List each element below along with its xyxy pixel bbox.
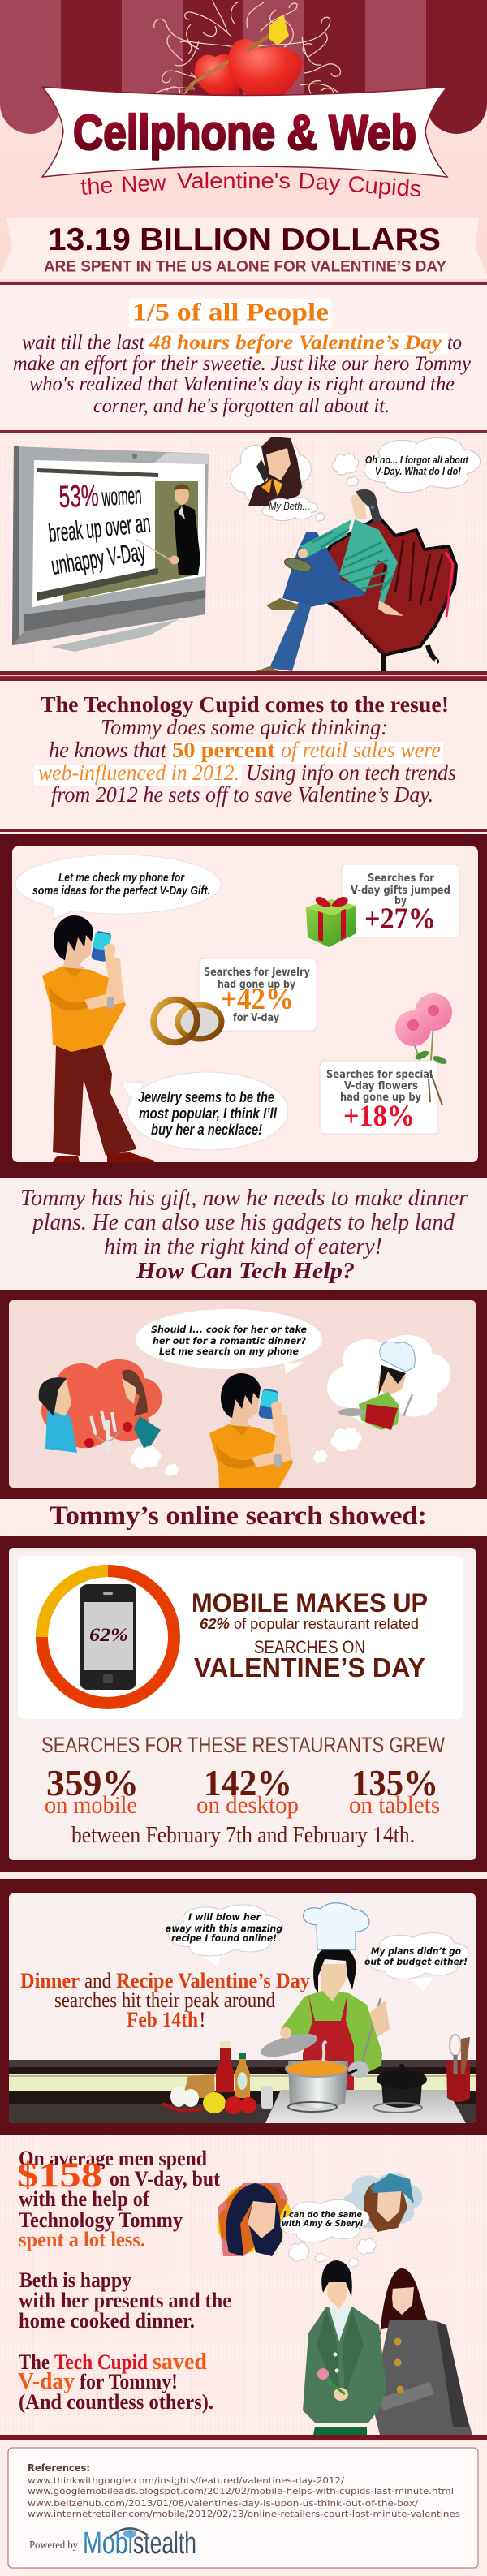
stat: 142% on desktop: 142% [204, 1762, 292, 1803]
stat: 359% on mobile: on mobile [45, 1790, 137, 1819]
body text: Using info on tech trends [246, 760, 456, 785]
slide text: 53% women break up over an unhappy V-Day: 53% [58, 479, 99, 515]
stat: 142% on desktop: on desktop [196, 1790, 299, 1819]
speech bubble: jewelry: Jewelry seems to be the [138, 1089, 274, 1105]
thought cloud: oh no: V-Day. What do I do! [375, 466, 461, 477]
stat: 142% on desktop [196, 1762, 299, 1819]
thought cloud: other girls: I can do the same [283, 2209, 362, 2220]
body text: web-influenced in 2012. [38, 760, 239, 785]
callout: mobile makes up: MOBILE MAKES UP [192, 1588, 428, 1618]
text: spend: spent a lot less. [19, 2228, 145, 2251]
donut chart: 62% mobile [42, 1571, 174, 1703]
stat card: flowers +18% [320, 993, 452, 1134]
subtitle: Day [298, 168, 341, 196]
icon: smartphone: 62% [89, 1625, 128, 1645]
speech bubble: jewelry: buy her a necklace! [151, 1122, 262, 1138]
tv [12, 446, 209, 652]
references list: www.internetretailer.com/mobile/2012/02/13/online-retailers-court-last-minute-valentines [28, 2509, 460, 2519]
stat card: flowers +18%: Searches for special [326, 1069, 433, 1081]
speech bubble: should I: Let me search on my phone [159, 1346, 299, 1357]
woman [372, 2268, 472, 2435]
stat card: jewelry +42%: had gone up by [218, 979, 295, 991]
stat: 135% on tablets: on tablets [349, 1790, 440, 1819]
body text: he knows that [49, 738, 167, 762]
panel: references footer [0, 2440, 487, 2576]
thought cloud: oh no: Oh no... I forgot all about [365, 454, 469, 466]
speech bubble: should I: Should I... cook for her or take [151, 1324, 307, 1335]
icon: wedding rings [147, 993, 222, 1049]
stat card: jewelry +42%: for V-day [233, 1012, 279, 1024]
panel: header [0, 0, 487, 286]
awning stripes [0, 0, 487, 134]
stat card: gifts +27%: Searches for [368, 872, 435, 885]
speech bubble: should I [136, 1309, 322, 1374]
speech bubble: check my phone: some ideas for the perfect V-Day Gift. [32, 885, 210, 898]
thought cloud: oh no [332, 437, 481, 493]
text: dinner and recipe searches [20, 1969, 310, 2031]
panel: tommy watching tv [0, 430, 487, 671]
subtitle [80, 168, 423, 201]
icon: smartphone [80, 1584, 136, 1690]
title: Cellphone & Web [73, 106, 416, 160]
stat card: flowers +18%: +18% [343, 1100, 415, 1133]
slide text: 53% women break up over an unhappy V-Day: women [101, 480, 142, 511]
body text: 48 hours before Valentine’s Day [149, 332, 442, 354]
text: spend [17, 2147, 220, 2251]
body text: to [447, 332, 462, 354]
text: dinner and recipe searches: searches hit their peak around [54, 1988, 275, 2012]
stove and pots [265, 2041, 466, 2123]
callout: mobile makes up [192, 1588, 428, 1682]
title banner [42, 87, 447, 177]
slide text: 53% women break up over an unhappy V-Day: break up over an [47, 508, 152, 548]
stat caption: ARE SPENT IN THE US ALONE FOR VALENTINE’S DAY [44, 258, 446, 276]
body text: of retail sales were [281, 738, 441, 762]
speech bubble: jewelry [121, 1072, 288, 1150]
illustration: tommy on sofa [256, 489, 456, 671]
text: spend: On average men spend [19, 2147, 207, 2170]
credit: powered by: Powered by [29, 2539, 78, 2552]
illustration: tommy with phone [209, 1373, 293, 1488]
thought bubble: blow her away: I will blow her [188, 1911, 261, 1923]
stat card: gifts +27% [306, 864, 459, 947]
slide text: 53% women break up over an unhappy V-Day: unhappy V-Day [49, 536, 148, 580]
stat ribbon [0, 218, 487, 279]
thought bubble: blow her away: recipe I found online! [171, 1932, 277, 1944]
man [303, 2260, 386, 2435]
stat: 135% on tablets: 135% [351, 1762, 438, 1803]
panel: gift search [0, 834, 487, 1178]
illustration: chef tommy [258, 1903, 390, 2102]
subtitle: the [80, 172, 114, 200]
heading: online search [0, 1499, 487, 1536]
stat card: flowers +18%: had gone up by [340, 1092, 421, 1104]
logo: Mobistealth [83, 2526, 196, 2561]
callout: mobile makes up: VALENTINE’S DAY [194, 1652, 425, 1682]
stat card: gifts +27%: by [394, 895, 407, 907]
text: beth: home cooked dinner. [19, 2309, 195, 2333]
text: spend: with the help of [19, 2187, 149, 2211]
heading: 1/5 of all People: 1/5 of all People [132, 297, 329, 326]
stat card: flowers +18%: V-day flowers [344, 1080, 418, 1092]
thought bubble: plans budget [364, 1933, 468, 1991]
illustration: couple [303, 2260, 472, 2435]
stat: 135% on tablets [349, 1762, 440, 1819]
body text: who's realized that Valentine's day is right around the [29, 373, 455, 395]
icon: gift box [306, 897, 356, 947]
speech bubble: jewelry: most popular, I think I’ll [139, 1105, 278, 1122]
speech bubble: check my phone [15, 855, 221, 920]
person [256, 489, 403, 671]
kitchen counter [9, 2060, 476, 2123]
ingredients [162, 2041, 273, 2114]
thought: tommy cooking [313, 1335, 450, 1463]
presenter slide [37, 468, 200, 601]
stat card: jewelry +42% [147, 958, 317, 1049]
stat card: gifts +27%: +27% [364, 902, 436, 936]
speech bubble: check my phone: Let me check my phone for [58, 872, 185, 885]
caption: My Beth: My Beth... [269, 500, 310, 512]
body text: make an effort for their sweetie. Just like our hero Tommy [13, 353, 472, 375]
divider [0, 671, 487, 681]
body text: from 2012 he sets off to save Valentine’s Day. [51, 782, 433, 807]
panel: dinner text: Tommy has his gift, now he needs to make dinner [20, 1185, 468, 1211]
text: dinner and recipe searches: Recipe Valentine’s Day [116, 1969, 310, 1992]
speech bubble: should I: her out for a romantic dinner? [153, 1335, 306, 1346]
callout: mobile makes up: 62% [200, 1616, 230, 1632]
references list: www.googlemobileads.blogspot.com/2012/02/mobile-helps-with-cupids-last-minute.html [28, 2486, 454, 2496]
panel: one fifth of people [0, 285, 487, 430]
utensil holder [446, 2035, 470, 2102]
panel: kitchen [0, 1879, 487, 2135]
references list: www.thinkwithgoogle.com/insights/featured/valentines-day-2012/ [28, 2475, 344, 2486]
thought cloud: my beth [262, 498, 317, 521]
body text: 50 percent [172, 738, 275, 762]
thought cloud: other girls: with Amy & Sheryl [282, 2218, 363, 2229]
thought: romantic dinner [39, 1359, 179, 1476]
panel: dinner text [0, 1178, 487, 1290]
stat card: jewelry +42%: Searches for Jewelry [204, 967, 310, 979]
thought bubble: blow her away [166, 1905, 283, 1966]
panel: technology cupid text [0, 681, 487, 832]
heading: online search: Tommy’s online search showed: [50, 1501, 427, 1531]
text: dinner and recipe searches: and [84, 1969, 111, 1992]
text: beth: Beth is happy [19, 2268, 131, 2292]
thought cloud: Beth [231, 437, 325, 521]
references list [28, 2475, 460, 2519]
illustration: tommy [42, 915, 154, 1162]
references list: www.belizehub.com/2013/01/08/valentines-day-is-upon-us-think-out-of-the-box/ [28, 2498, 418, 2509]
panel: dinner text: plans. He can also use his gadgets to help land [31, 1209, 455, 1235]
thought bubble: plans budget: My plans didn’t go [371, 1945, 461, 1957]
icon: hearts and arrow [183, 15, 303, 99]
stat: 13.19 billion dollars: 13.19 BILLION DOLLARS [48, 222, 441, 257]
stat card: gifts +27%: V-day gifts jumped [351, 885, 450, 897]
text: dinner and recipe searches: Feb 14th [127, 2008, 198, 2031]
logo: Mobistealth: stealth [133, 2526, 196, 2561]
text: spend: $158 [17, 2156, 102, 2195]
stat: 359% on mobile: 359% [46, 1762, 139, 1803]
text: tech cupid saved: (And countless others). [19, 2390, 213, 2414]
text: beth: with her presents and the [19, 2289, 231, 2312]
panel: mobile search stats [0, 1536, 487, 1872]
date range: between February 7th and February 14th. [71, 1823, 415, 1848]
text: tech cupid saved: for Tommy! [80, 2370, 178, 2393]
body text: corner, and he's forgotten all about it. [93, 395, 390, 417]
heading: how can tech help: How Can Tech Help? [136, 1258, 355, 1284]
subtitle: Valentine's [177, 168, 291, 193]
text: dinner and recipe searches: ! [199, 2008, 206, 2031]
subtitle: Cupids [347, 171, 423, 201]
text: spend: on V-day, but [110, 2167, 220, 2190]
body text [13, 332, 472, 417]
heading highlight [129, 299, 331, 328]
callout: mobile makes up: SEARCHES ON [254, 1637, 365, 1657]
text: tech cupid saved: V-day [18, 2368, 75, 2394]
text: tech cupid saved: saved [153, 2349, 207, 2375]
stat card: jewelry +42%: +42% [221, 983, 294, 1016]
slide text: 53% women break up over an unhappy V-Day [47, 479, 152, 580]
thought bubble: blow her away: away with this amazing [166, 1923, 282, 1934]
references heading: References: [28, 2462, 90, 2474]
text: dinner and recipe searches: Dinner [20, 1969, 80, 1992]
floral ornament [146, 0, 345, 99]
text: beth [19, 2268, 231, 2333]
logo: Mobistealth: Mobi [83, 2526, 133, 2561]
thought cloud: other girls [218, 2173, 422, 2267]
body text: Tommy does some quick thinking: [101, 715, 388, 739]
text: tech cupid saved: Tech Cupid [54, 2350, 148, 2374]
text: spend: Technology Tommy [19, 2208, 183, 2232]
heading: technology cupid: The Technology Cupid comes to the resue! [41, 692, 449, 717]
icon: roses [395, 993, 452, 1105]
panel: closing [0, 2135, 487, 2435]
body text [34, 715, 456, 807]
callout: mobile makes up: of popular restaurant related [234, 1616, 419, 1632]
subtitle: New [121, 170, 167, 197]
thought bubble: plans budget: out of budget either! [364, 1956, 468, 1967]
body text: wait till the last [22, 332, 145, 354]
text: tech cupid saved [18, 2349, 213, 2414]
text: tech cupid saved: The [19, 2350, 50, 2374]
panel: dinner plans [0, 1290, 487, 1510]
panel: dinner text: him in the right kind of eatery! [104, 1234, 382, 1260]
